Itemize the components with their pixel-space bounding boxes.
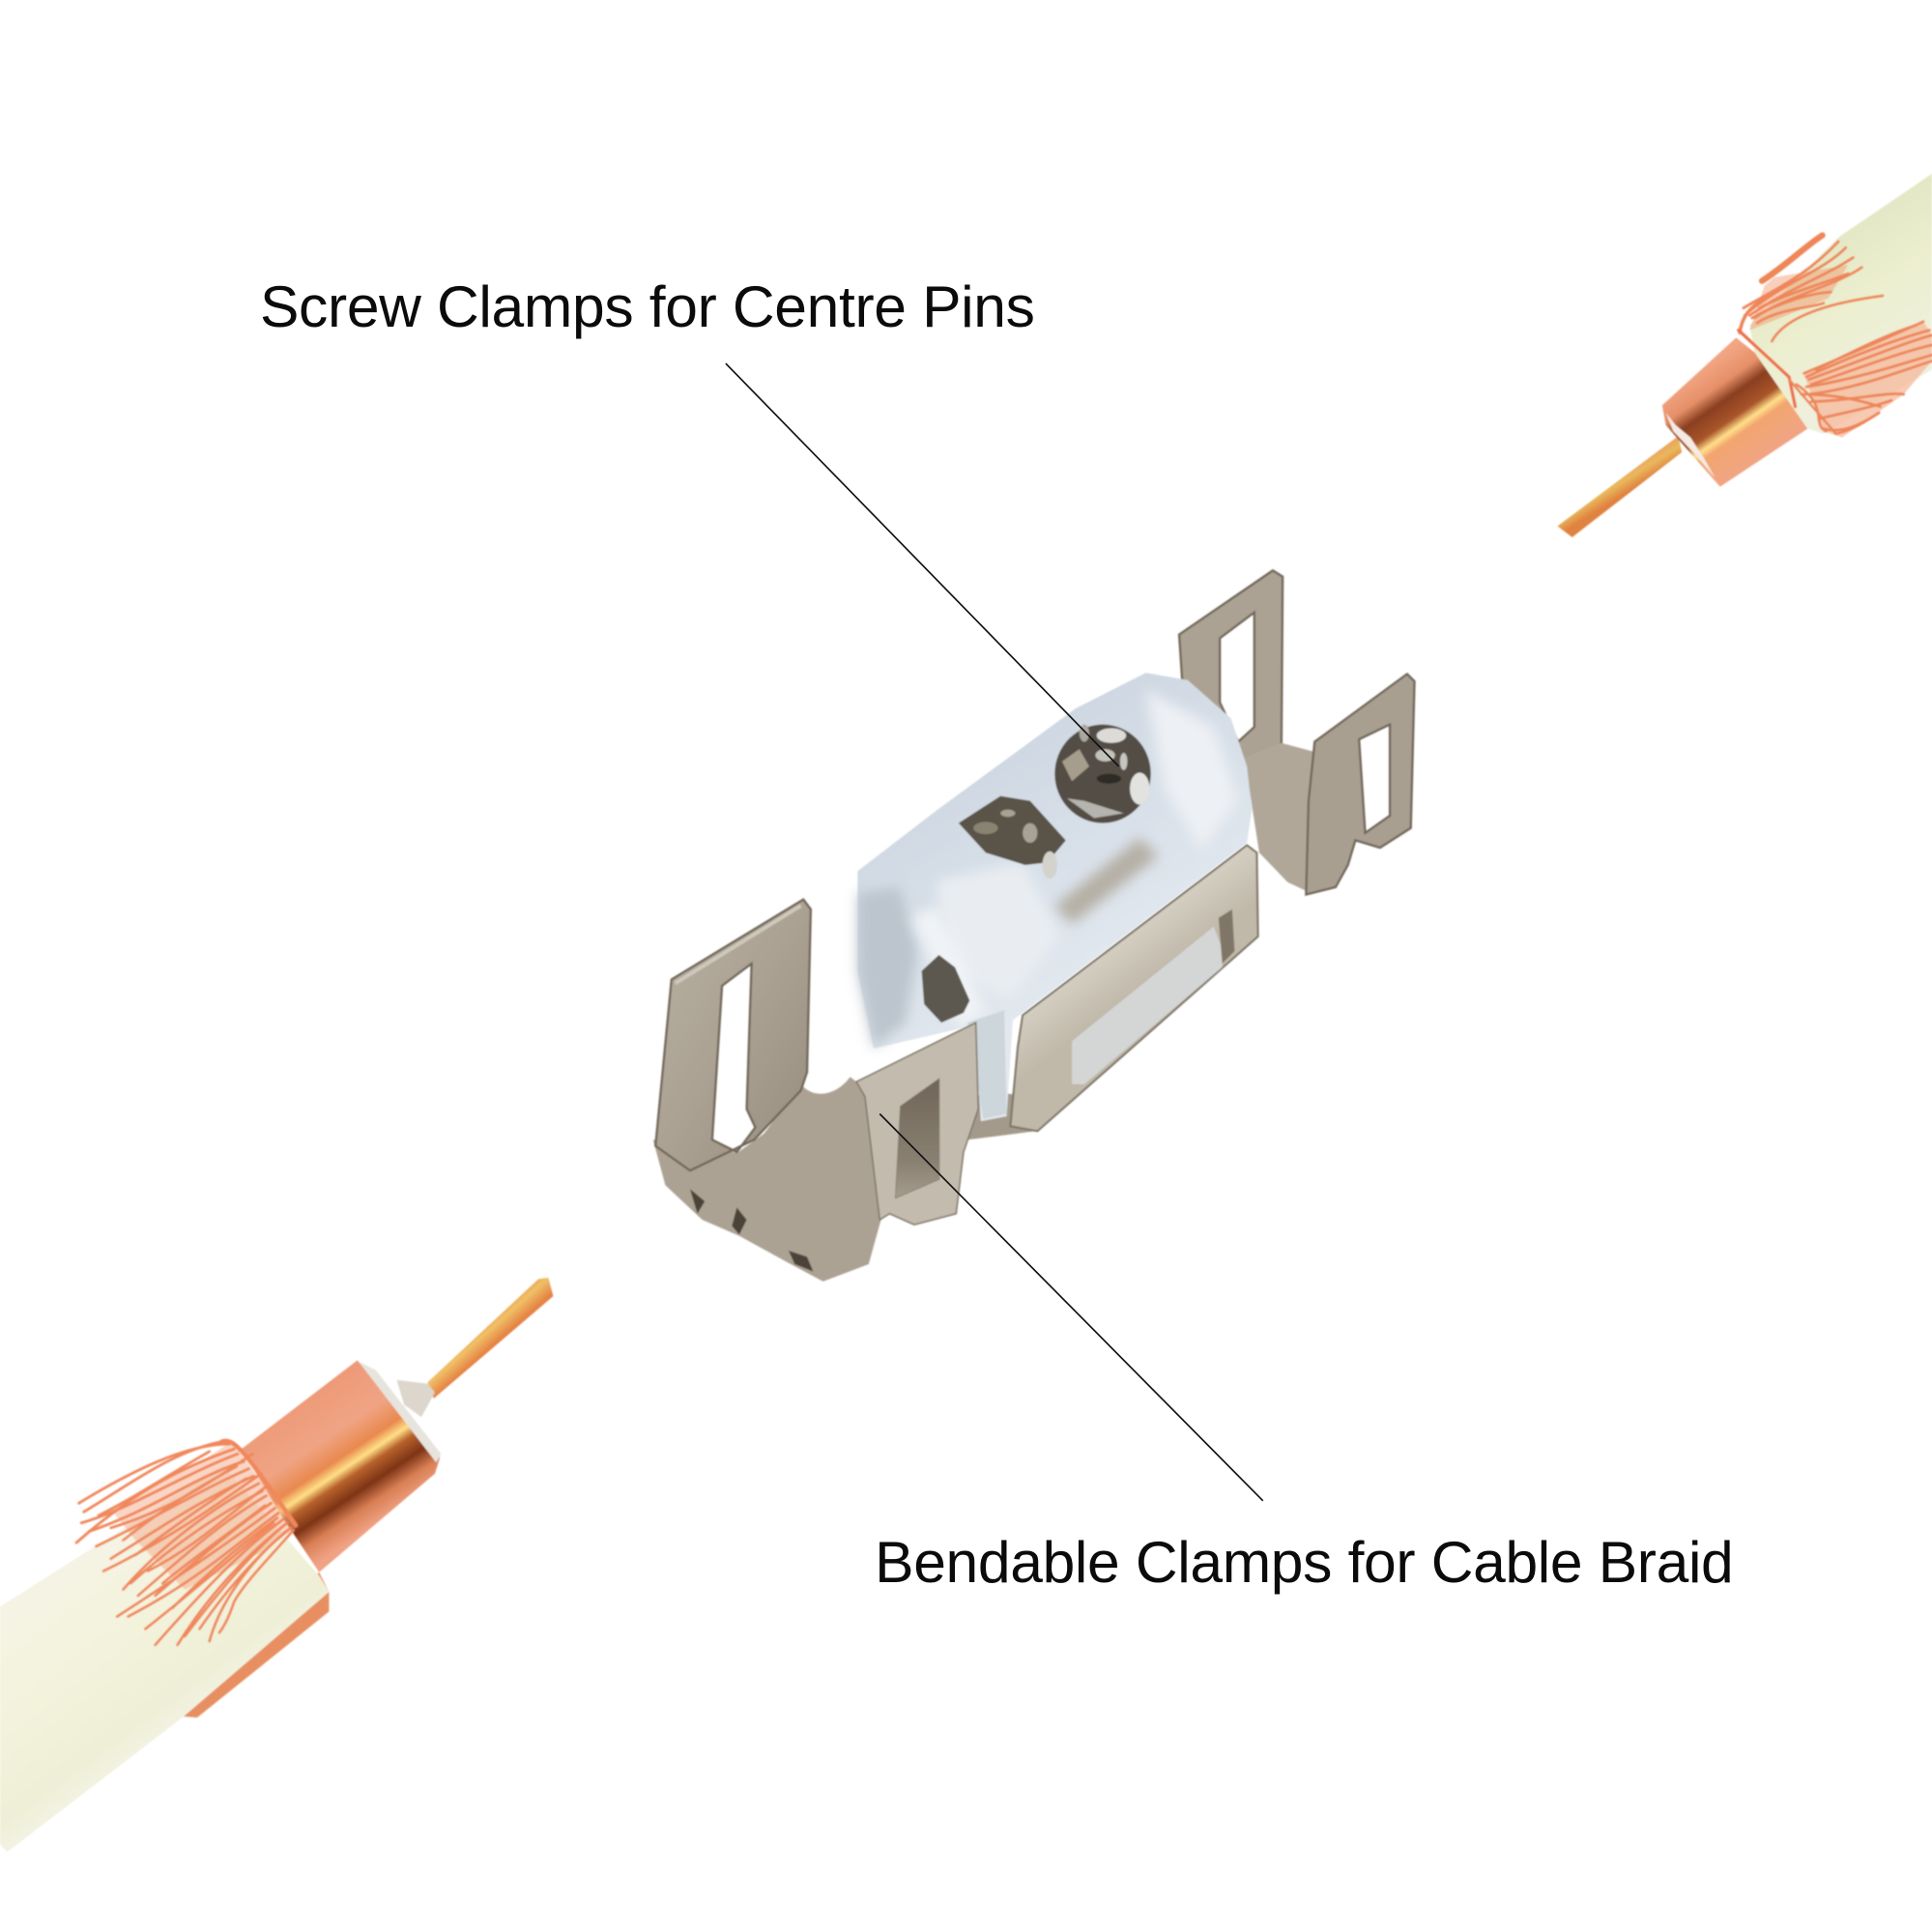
left base plate — [653, 1077, 881, 1282]
screw hole — [922, 955, 969, 1023]
terminal block — [857, 673, 1252, 1121]
right base plate — [1245, 743, 1313, 892]
tab window interior — [896, 1080, 938, 1197]
connector: metal clamp with plastic terminal block — [653, 570, 1415, 1282]
leader line: bendable clamps — [879, 1113, 1263, 1501]
jacket — [1749, 174, 1932, 434]
cable: bottom-left coaxial cable — [0, 1278, 553, 1852]
front screw head — [959, 796, 1066, 879]
centre pin — [1557, 436, 1682, 537]
braid strands — [76, 1441, 296, 1645]
jacket — [0, 1465, 329, 1852]
copper under jacket — [183, 1572, 329, 1717]
cable: top-right coaxial cable — [1557, 174, 1932, 537]
plate inset panel — [1072, 927, 1223, 1084]
left tab top edge highlight — [676, 906, 801, 983]
front left clamp tab — [856, 1023, 978, 1225]
ferrule end face — [359, 1362, 441, 1462]
heading: screw clamps label: Screw Clamps for Centre Pins — [260, 274, 1035, 339]
block shading — [857, 690, 1238, 1119]
insulator — [397, 1380, 435, 1417]
ferrule end face — [1666, 413, 1716, 478]
left clamp tab — [655, 900, 811, 1170]
base plate scuffs — [690, 1189, 813, 1272]
metal behind block drip — [949, 1090, 1035, 1139]
rear screw head — [1054, 725, 1151, 823]
front clamp plate — [1010, 846, 1258, 1131]
copper ferrule — [1662, 337, 1807, 487]
rear right clamp tab — [1179, 570, 1283, 770]
centre pin — [427, 1278, 553, 1399]
leader line: screw clamps — [726, 363, 1119, 766]
plate slot — [1219, 909, 1234, 964]
heading: bendable clamps label: Bendable Clamps for Cable Braid — [875, 1529, 1734, 1595]
braid strands — [1739, 236, 1932, 438]
copper ferrule — [242, 1360, 440, 1572]
front right clamp tab — [1306, 674, 1415, 895]
